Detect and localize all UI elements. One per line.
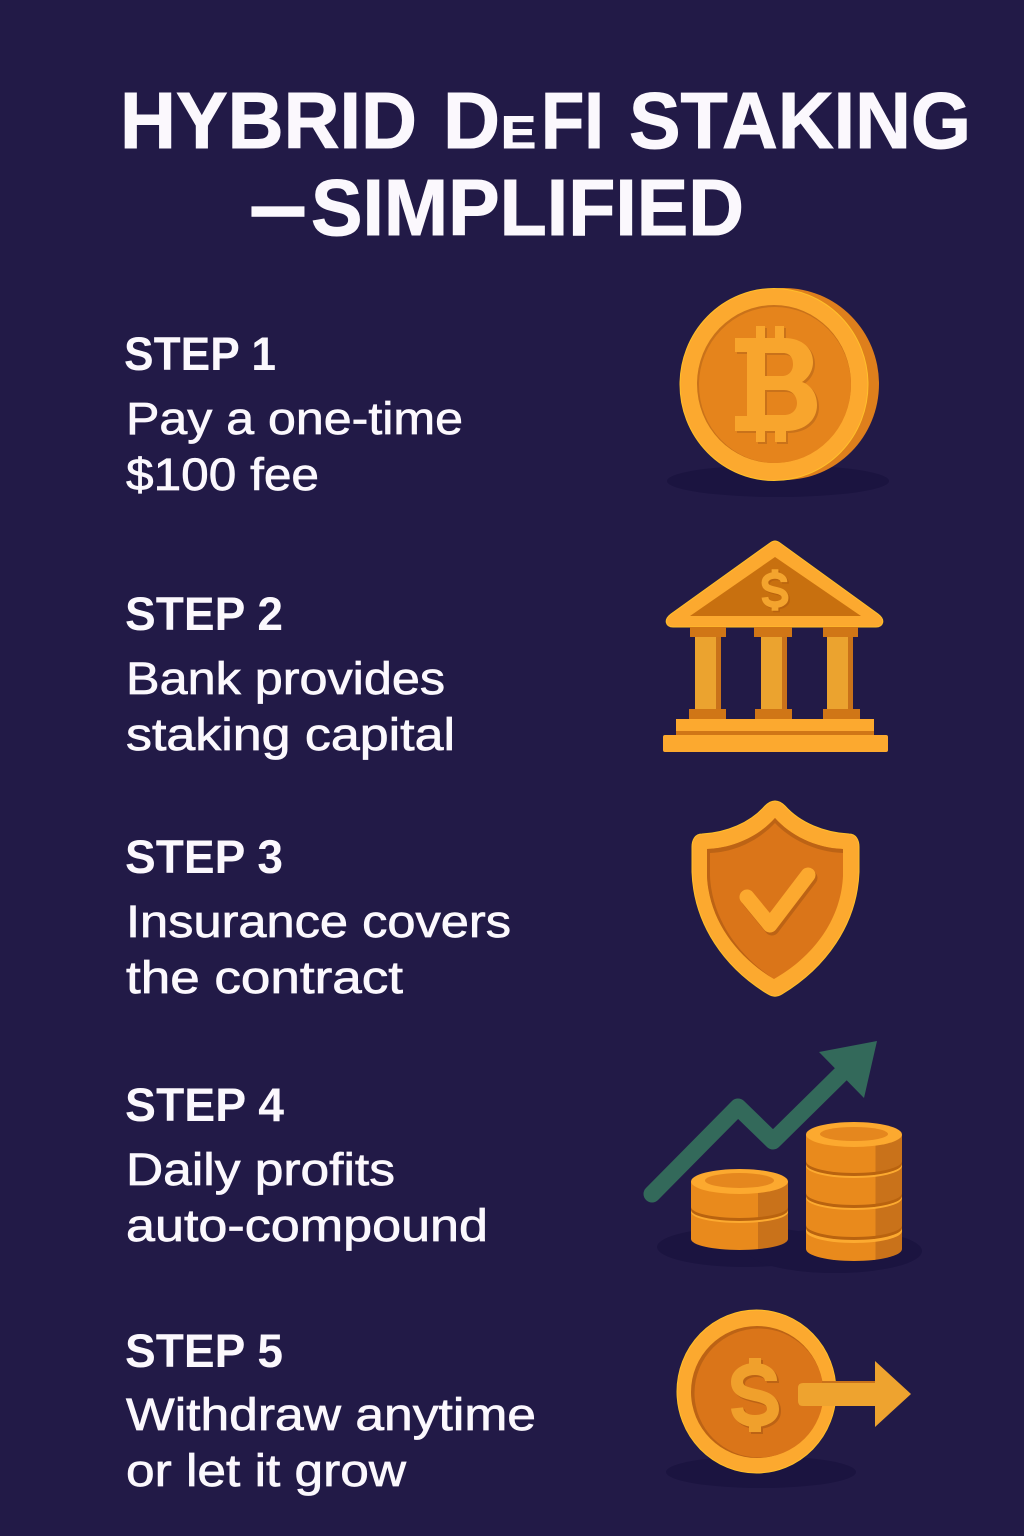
step 3 heading: STEP 3: [125, 830, 283, 883]
right coin stack: [806, 1122, 902, 1261]
step 1 description: [126, 393, 463, 500]
step 1 heading: STEP 1: [124, 327, 276, 380]
step 2 description: Bank provides: [126, 653, 445, 704]
title: D: [443, 76, 500, 165]
step 3 description: the contract: [126, 952, 404, 1003]
step 4 description: auto-compound: [126, 1200, 488, 1251]
title: FI: [541, 76, 604, 165]
panel: step 4: [125, 1041, 922, 1273]
icon: coin stacks with rising arrow: [652, 1041, 922, 1273]
panel: step 5: [125, 1310, 911, 1496]
title: SIMPLIFIED: [311, 163, 744, 252]
step 5 description: [126, 1389, 536, 1496]
left coin stack: [691, 1169, 788, 1250]
step 4 description: Daily profits: [126, 1144, 395, 1195]
step 3 description: [126, 896, 511, 1003]
step 1 description: Pay a one-time: [126, 393, 463, 444]
title: STAKING: [629, 76, 971, 165]
icon: bitcoin coin: [667, 288, 889, 497]
panel: step 3: [125, 801, 859, 1003]
title: [120, 76, 971, 252]
step 3 description: Insurance covers: [126, 896, 511, 947]
step 5 heading: STEP 5: [125, 1324, 283, 1377]
title: –: [250, 161, 306, 250]
title: HYBRID: [120, 76, 417, 165]
step 4 heading: STEP 4: [125, 1078, 284, 1131]
step 5 description: or let it grow: [126, 1445, 407, 1496]
icon: bank: [663, 541, 888, 752]
step 2 description: [126, 653, 455, 760]
icon: shield with check: [692, 801, 859, 996]
step 2 heading: STEP 2: [125, 587, 283, 640]
title: E: [501, 107, 536, 158]
step 1 description: $100 fee: [126, 449, 319, 500]
step 2 description: staking capital: [126, 709, 455, 760]
icon: dollar coin with arrow: [666, 1310, 911, 1488]
panel: step 1: [124, 288, 889, 500]
step 5 description: Withdraw anytime: [126, 1389, 536, 1440]
step 4 description: [126, 1144, 488, 1251]
panel: step 2: [125, 541, 888, 760]
